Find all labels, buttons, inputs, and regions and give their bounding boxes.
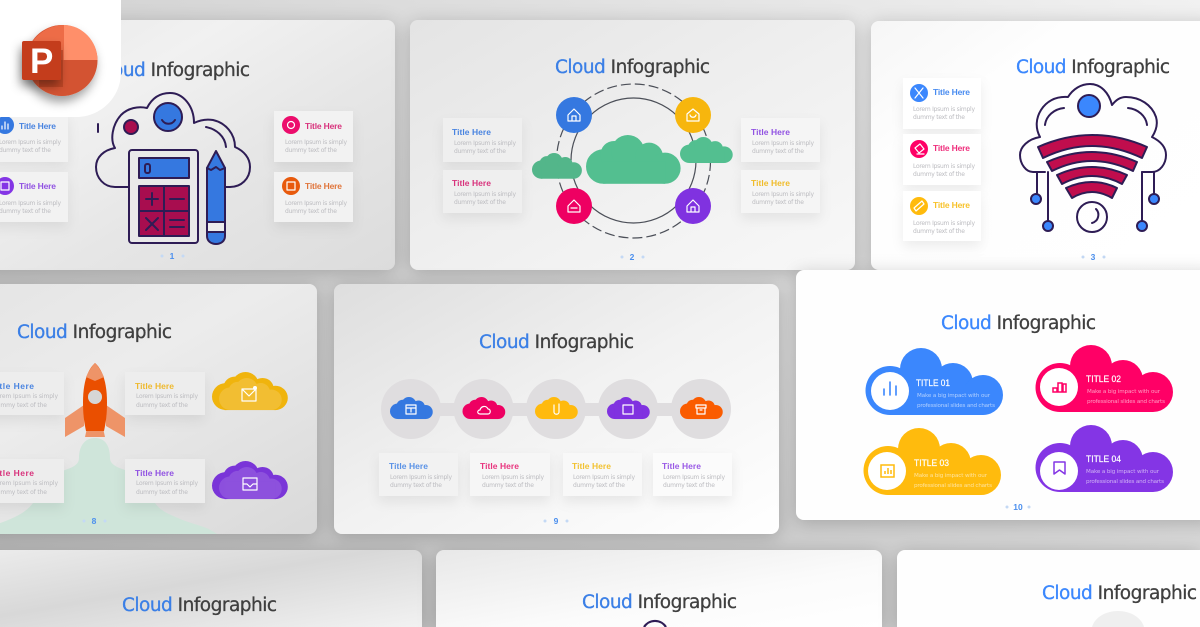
icon: big green cloud: [586, 135, 681, 184]
slide 2 card: purple: dummy text of the: [752, 148, 804, 155]
slide 1 card: purple: dummy text of the: [0, 208, 51, 215]
cloud: title 03: professional slides and charts: [914, 483, 992, 489]
icon: pink house node: [556, 188, 592, 224]
slide 11 title: Cloud Infographic: [122, 595, 277, 616]
slide 3 card: pink: [903, 134, 981, 185]
cloud: title 01: TITLE 01: [916, 378, 950, 388]
process track: [381, 379, 731, 439]
slide 3 card: pink: Lorem Ipsum is simply: [913, 163, 975, 170]
icon: pink cloud: [462, 397, 505, 419]
icon: small right green cloud: [680, 137, 733, 163]
icon: cloud with calculator and pencil: [96, 93, 250, 244]
slide 1 card: pink: Title Here: [305, 121, 342, 131]
icon: faint cloud: [1092, 611, 1144, 627]
slide 2 card: yellow: [741, 170, 820, 213]
slide 9 card: yellow: [563, 453, 642, 496]
slide 8: rocket: [0, 284, 317, 534]
slide 9 title: Cloud Infographic: [479, 332, 634, 353]
slide 3 card: pink: Title Here: [933, 143, 970, 153]
slide 2 card: pink: dummy text of the: [454, 199, 506, 206]
slide 9 card: yellow: dummy text of the: [573, 482, 625, 489]
page number 1: [160, 251, 184, 261]
cloud: title 04: [1036, 425, 1173, 492]
icon: yellow cloud with mail: [212, 372, 288, 410]
slide 12 title: Cloud Infographic: [582, 592, 737, 613]
slide 1 card: pink: Lorem Ipsum is simply: [285, 139, 347, 146]
slide 3 card: yellow: Title Here: [933, 200, 970, 210]
cloud: title 02: TITLE 02: [1086, 374, 1121, 384]
slide 8 card: purple: [125, 459, 205, 503]
slide 9 card: pink: dummy text of the: [482, 482, 534, 489]
slide 12: partial: [436, 550, 882, 627]
slide 8 card: yellow: [125, 372, 205, 415]
slide 2 card: blue: dummy text of the: [454, 148, 506, 155]
slide 10: four coloured clouds: [796, 270, 1200, 520]
slide 8 card: purple: Title Here: [135, 468, 174, 478]
slide 13 title: Cloud Infographic: [1042, 583, 1197, 604]
slide 9 card: blue: [379, 453, 458, 496]
slide 9 card: purple: [653, 453, 732, 496]
slide 8 card: yellow: Lorem Ipsum is simply: [136, 393, 198, 400]
slide 1 card: orange: [274, 172, 353, 222]
PowerPoint logo badge: [0, 0, 121, 117]
slide 8 card: yellow: Title Here: [135, 381, 174, 391]
cloud: title 03: Make a big impact with our: [914, 473, 988, 479]
slide 8 card: blue: [0, 372, 64, 415]
slide 1 card: orange: dummy text of the: [285, 208, 337, 215]
icon: rocket smoke: [0, 438, 217, 534]
page number 9: 9: [554, 516, 559, 526]
slide 3 card: yellow: dummy text of the: [913, 228, 965, 235]
slide 9 card: blue: dummy text of the: [390, 482, 442, 489]
icon: yellow mail node: [675, 97, 711, 133]
slide 1: calculator cloud: [0, 20, 395, 270]
page number 10: [1006, 502, 1030, 512]
cloud: title 02: [1036, 345, 1173, 412]
icon: partial dark circle: [644, 621, 666, 627]
slide 1 card: blue: Lorem Ipsum is simply: [0, 139, 61, 146]
slide 3 card: yellow: Lorem Ipsum is simply: [913, 220, 975, 227]
slide 1 card: purple: Title Here: [19, 181, 56, 191]
slide 11: partial: [0, 550, 422, 627]
slide 2 card: yellow: Lorem Ipsum is simply: [752, 191, 814, 198]
slide 9 card: blue: Lorem Ipsum is simply: [390, 474, 452, 481]
slide 1 card: blue: [0, 112, 68, 162]
slide 9 card: purple: dummy text of the: [663, 482, 715, 489]
slide 1 title: Cloud Infographic: [95, 60, 250, 81]
slide 2 card: purple: Title Here: [751, 127, 790, 137]
slide 2 card: purple: [741, 118, 820, 162]
slide 13: partial: [897, 550, 1200, 627]
icon: orange cloud: [680, 397, 723, 419]
slide 3: wifi cloud: [871, 21, 1200, 270]
slide 1 card: pink: dummy text of the: [285, 147, 337, 154]
slide 9 card: pink: Lorem Ipsum is simply: [482, 474, 544, 481]
slide 2 card: pink: Title Here: [452, 178, 491, 188]
icon: PowerPoint logo: P: [30, 42, 53, 81]
icon: purple cloud with inbox: [212, 461, 288, 499]
slide 9 card: pink: Title Here: [480, 461, 519, 471]
slide 2 title: Cloud Infographic: [555, 57, 710, 78]
slide 1 card: orange: Title Here: [305, 181, 342, 191]
slide 9 card: blue: Title Here: [389, 461, 428, 471]
icon: yellow cloud: [535, 397, 578, 419]
slide 1 card: purple: [0, 172, 68, 222]
cloud: title 03: TITLE 03: [914, 458, 949, 468]
icon: cloud with wifi signal: [1020, 84, 1166, 232]
slide 8 card: purple: Lorem Ipsum is simply: [136, 480, 198, 487]
slide 2 card: pink: [443, 170, 522, 213]
slide 2 card: blue: Title Here: [452, 127, 491, 137]
slide 8 card: pink: [0, 459, 64, 503]
slide 1 card: orange: Lorem Ipsum is simply: [285, 200, 347, 207]
icon: blue house node: [556, 97, 592, 133]
cloud: title 02: Make a big impact with our: [1087, 389, 1161, 395]
page number 3: 3: [1091, 252, 1096, 262]
slide 9 card: purple: Title Here: [662, 461, 701, 471]
slide 8 card: yellow: dummy text of the: [136, 402, 188, 409]
slide 2 card: blue: [443, 118, 522, 162]
slide 1 card: blue: Title Here: [19, 121, 56, 131]
slide 10 title: Cloud Infographic: [941, 313, 1096, 334]
cloud: title 04: TITLE 04: [1086, 454, 1121, 464]
slide 1 card: blue: dummy text of the: [0, 147, 51, 154]
page number 10: 10: [1013, 502, 1023, 512]
slide 3 card: blue: [903, 78, 981, 129]
slide 1 card: purple: Lorem Ipsum is simply: [0, 200, 61, 207]
icon: purple cloud: [607, 397, 650, 419]
slide 2 card: blue: Lorem Ipsum is simply: [454, 140, 516, 147]
slide 9 card: yellow: Lorem Ipsum is simply: [573, 474, 635, 481]
slide 2: circular cloud cycle: [410, 20, 855, 270]
slide 3 card: blue: Lorem Ipsum is simply: [913, 106, 975, 113]
slide 8 card: purple: dummy text of the: [136, 489, 188, 496]
slide 3 card: blue: Title Here: [933, 87, 970, 97]
cloud: title 02: professional slides and charts: [1087, 399, 1165, 405]
icon: rocket: [65, 363, 125, 437]
slide 9 card: yellow: Title Here: [572, 461, 611, 471]
slide 2 card: pink: Lorem Ipsum is simply: [454, 191, 516, 198]
cloud: title 01: professional slides and charts: [917, 403, 995, 409]
page number 3: [1082, 252, 1106, 262]
page number 1: 1: [170, 251, 175, 261]
slide 2 card: yellow: dummy text of the: [752, 199, 804, 206]
page number 2: [620, 252, 644, 262]
page number 2: 2: [630, 252, 635, 262]
slide 2 card: purple: Lorem Ipsum is simply: [752, 140, 814, 147]
slide 9: process of five clouds: [334, 284, 779, 534]
slide 3 card: pink: dummy text of the: [913, 171, 965, 178]
cloud: title 01: [866, 348, 1003, 415]
icon: purple house node: [675, 188, 711, 224]
circular rings: [556, 84, 710, 238]
slide 3 card: blue: dummy text of the: [913, 114, 965, 121]
slide 9 card: purple: Lorem Ipsum is simply: [663, 474, 725, 481]
cloud: title 03: [864, 428, 1001, 495]
page number 8: 8: [92, 516, 97, 526]
slide 3 card: yellow: [903, 191, 981, 241]
slide 2 card: yellow: Title Here: [751, 178, 790, 188]
cloud: title 01: Make a big impact with our: [917, 393, 991, 399]
cloud: title 04: Make a big impact with our: [1086, 469, 1160, 475]
icon: blue cloud: [390, 397, 433, 419]
slide 3 title: Cloud Infographic: [1016, 57, 1170, 78]
slide 1 card: pink: [274, 111, 353, 162]
slide 9 card: pink: [470, 453, 550, 496]
slide 8 title: Cloud Infographic: [17, 322, 172, 343]
icon: small left green cloud: [532, 153, 582, 179]
cloud: title 04: professional slides and charts: [1086, 479, 1164, 485]
page number 9: [544, 516, 568, 526]
page number 8: [82, 516, 106, 526]
